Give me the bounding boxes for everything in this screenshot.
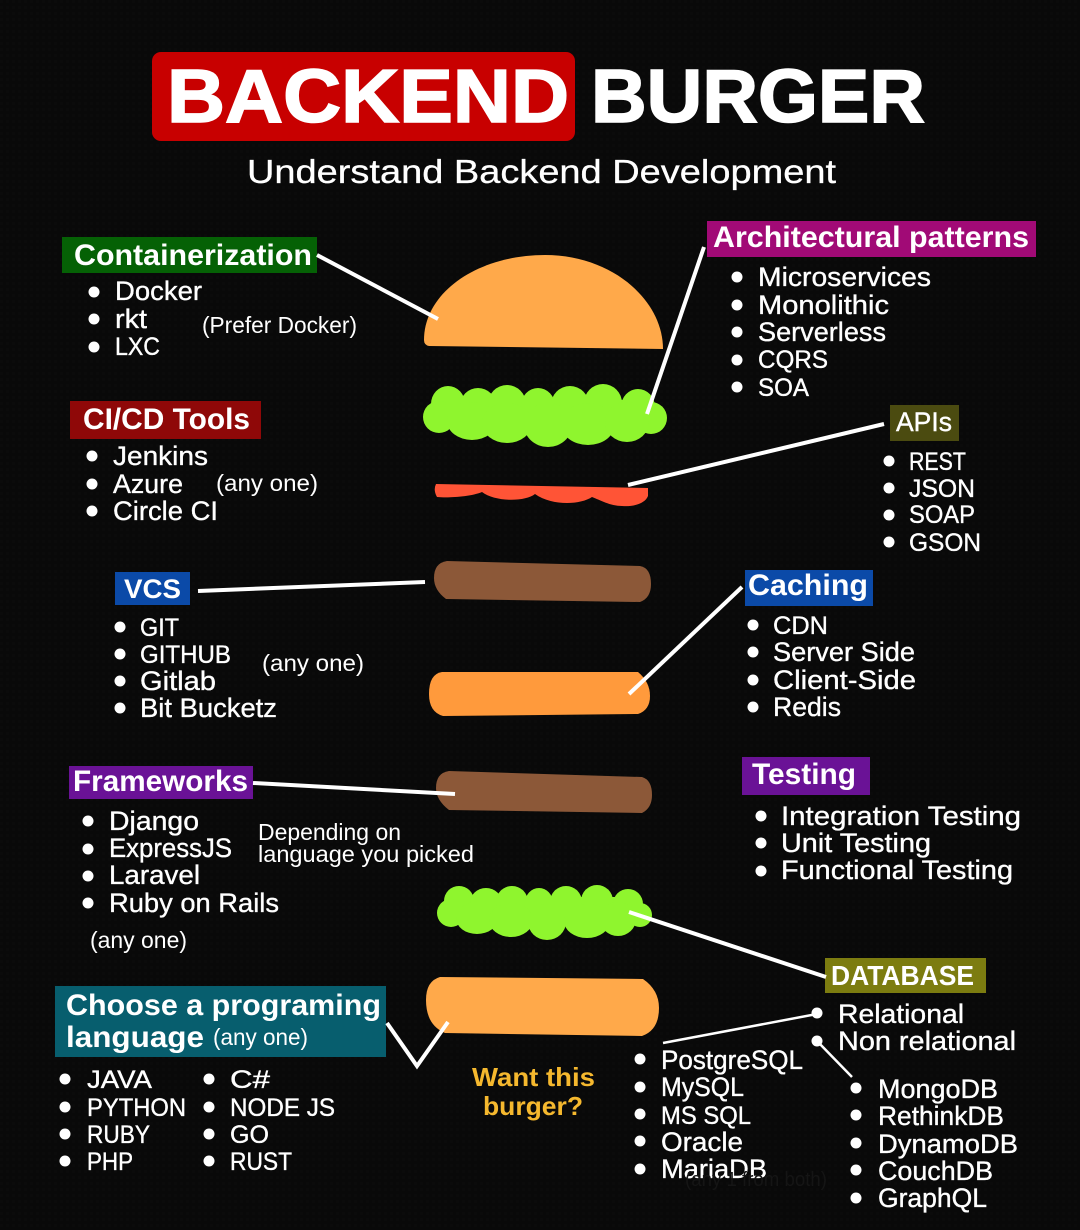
arrow: caching to cheese [629, 587, 742, 694]
heading: database: DATABASE [831, 960, 974, 991]
list: ci/cd: Jenkins [113, 441, 208, 471]
lettuce top [423, 384, 667, 447]
list: apis: REST [909, 448, 966, 476]
list: caching: Client-Side [773, 665, 916, 695]
heading: testing: Testing [752, 758, 856, 791]
heading: vcs: VCS [124, 574, 181, 604]
heading: architectural patterns: Architectural patterns [713, 221, 1029, 254]
arrow: database to lettuce [629, 912, 826, 977]
panel: caching [629, 569, 916, 722]
list: vcs: GITHUB [140, 641, 231, 669]
arrow: relational to list [663, 1014, 817, 1043]
arrow: vcs to patty [198, 582, 425, 591]
list: languages column one: PHP [87, 1148, 133, 1176]
tomato [435, 484, 648, 506]
list: vcs [114, 614, 277, 723]
list: patterns: CQRS [758, 346, 828, 374]
panel: ci/cd tools [70, 401, 318, 526]
bottom bun [426, 977, 659, 1036]
list: caching [748, 612, 916, 722]
list: non relational databases [850, 1074, 1018, 1213]
cheese bun [429, 672, 650, 716]
list: relational databases: MS SQL [661, 1102, 751, 1130]
list: non relational databases: RethinkDB [878, 1101, 1004, 1131]
list: apis: GSON [909, 529, 981, 557]
arrow: apis to tomato [628, 424, 884, 485]
list: container tools: Docker [115, 276, 202, 306]
title: BACKEND [167, 54, 569, 138]
list: container tools [88, 276, 202, 361]
panel: containerization [62, 237, 438, 361]
title [152, 52, 925, 141]
note: faint overlapping text: (any 1 from both) [685, 1169, 827, 1191]
list: caching: Server Side [773, 637, 915, 667]
arrow: containerization to bun [317, 255, 438, 319]
callout: want this burger: Want this [472, 1062, 595, 1092]
patty top [434, 561, 651, 602]
list: apis: SOAP [909, 501, 975, 529]
list: frameworks: ExpressJS [109, 833, 232, 863]
heading: choose a programing language: (any one) [213, 1024, 308, 1050]
list: apis: JSON [909, 475, 975, 503]
list: languages column two: RUST [230, 1148, 292, 1176]
panel: architectural patterns [647, 221, 1036, 414]
list: non relational databases: MongoDB [878, 1074, 998, 1104]
heading: choose a programing language [55, 986, 386, 1057]
heading: apis [890, 405, 959, 441]
note: any one: (any one) [216, 470, 318, 496]
list: frameworks [82, 806, 279, 918]
list: relational databases: MariaDB [661, 1154, 767, 1184]
arrow: patterns to lettuce [647, 247, 704, 414]
list: vcs: Bit Bucketz [140, 693, 277, 723]
heading: apis: APIs [896, 407, 952, 437]
list: languages column two [204, 1066, 335, 1176]
list: frameworks: Ruby on Rails [109, 888, 279, 918]
arrow: language check to bottom bun [387, 1022, 448, 1066]
patty bottom [436, 771, 652, 813]
note: depending on language: language you picked [258, 841, 474, 867]
list: languages column one [60, 1066, 186, 1176]
callout: want this burger [472, 1062, 595, 1121]
list: patterns: Microservices [758, 262, 931, 292]
list: container tools: rkt [115, 304, 148, 334]
list: patterns: Monolithic [758, 290, 889, 320]
list: languages column one: PYTHON [87, 1094, 186, 1122]
heading: choose a programing language: Choose a programing [66, 989, 381, 1022]
list: languages column two: NODE JS [230, 1094, 335, 1122]
heading: ci/cd tools: CI/CD Tools [83, 403, 250, 436]
panel: apis [628, 405, 981, 557]
list: non relational databases: DynamoDB [878, 1129, 1018, 1159]
panel: database [629, 912, 1018, 1213]
list: relational databases: Oracle [661, 1127, 743, 1157]
list: caching: CDN [773, 612, 828, 640]
list: frameworks: Django [109, 806, 199, 836]
panel: frameworks [69, 765, 474, 953]
list: testing: Unit Testing [781, 828, 931, 858]
list: languages column two: C# [230, 1066, 270, 1094]
lettuce bottom [437, 885, 652, 940]
panel: vcs [114, 572, 425, 723]
list: non relational databases: GraphQL [878, 1183, 987, 1213]
heading: caching: Caching [748, 569, 868, 602]
panel: testing [742, 757, 1021, 885]
heading: vcs [115, 572, 190, 605]
list: patterns: SOA [758, 374, 809, 402]
list: patterns: Serverless [758, 317, 886, 347]
arrow: frameworks to patty [253, 783, 455, 794]
list: testing [756, 801, 1021, 885]
list: non relational databases: CouchDB [878, 1156, 993, 1186]
list: languages column one: RUBY [87, 1121, 150, 1149]
list: ci/cd: Circle CI [113, 496, 218, 526]
note: depending on language [258, 819, 474, 867]
subtitle: Understand Backend Development [247, 153, 836, 190]
list: ci/cd [86, 441, 218, 526]
top bun [424, 255, 663, 349]
list: relational databases: PostgreSQL [661, 1045, 803, 1075]
heading: containerization: Containerization [74, 239, 312, 272]
list: database types [812, 999, 1016, 1056]
callout: want this burger: burger? [483, 1091, 583, 1121]
list: database types: Relational [838, 999, 964, 1029]
list: relational databases [634, 1045, 803, 1184]
list: container tools: LXC [115, 333, 160, 361]
list: vcs: GIT [140, 614, 179, 642]
panel: programming language [55, 986, 448, 1176]
list: testing: Functional Testing [781, 855, 1013, 885]
heading: choose a programing language: language [66, 1021, 204, 1054]
burger illustration [423, 255, 667, 1036]
list: database types: Non relational [838, 1026, 1016, 1056]
list: ci/cd: Azure [113, 469, 183, 499]
list: frameworks: Laravel [109, 860, 200, 890]
list: caching: Redis [773, 692, 841, 722]
list: languages column two: GO [230, 1121, 269, 1149]
heading: frameworks: Frameworks [73, 765, 248, 798]
list: vcs: Gitlab [140, 666, 216, 696]
note: prefer docker: (Prefer Docker) [202, 312, 357, 338]
list: relational databases: MySQL [661, 1072, 744, 1102]
list: languages column one: JAVA [87, 1066, 152, 1094]
title: BURGER [591, 54, 925, 138]
note: any one: (any one) [90, 927, 187, 953]
list: apis [884, 448, 981, 557]
list: testing: Integration Testing [781, 801, 1021, 831]
arrow: non relational to list [817, 1041, 852, 1077]
note: depending on language: Depending on [258, 819, 401, 845]
list: patterns [732, 262, 931, 402]
note: any one: (any one) [262, 650, 364, 676]
